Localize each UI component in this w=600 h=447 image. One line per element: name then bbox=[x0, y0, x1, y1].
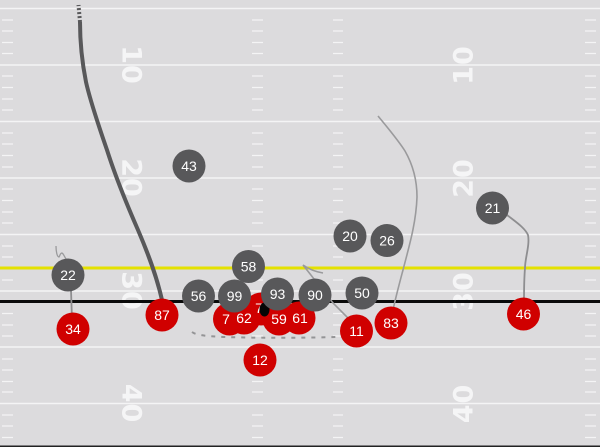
player 26 bbox=[370, 224, 404, 257]
route: player 34 bbox=[71, 290, 72, 320]
football bbox=[260, 302, 270, 316]
player 20: 20 bbox=[342, 228, 358, 244]
first down line bbox=[0, 266, 600, 270]
player 50 bbox=[346, 276, 378, 310]
yard numbers: right side: 30 bbox=[448, 271, 480, 311]
player 43 bbox=[172, 150, 206, 182]
yard numbers: left side: 10 bbox=[116, 45, 146, 85]
route: dashed protection bbox=[192, 332, 337, 338]
player 58 bbox=[232, 250, 265, 283]
yard numbers: left side bbox=[116, 45, 146, 423]
offense player numbers: 7 bbox=[222, 311, 230, 327]
offense player circles bbox=[56, 292, 540, 376]
defense players bbox=[52, 150, 509, 312]
yard numbers: left side: 30 bbox=[116, 271, 146, 311]
offense player numbers: 11 bbox=[349, 323, 364, 339]
routes bbox=[56, 5, 528, 338]
player 22 bbox=[52, 258, 84, 292]
yard numbers: right side: 10 bbox=[448, 45, 480, 85]
player 56: 56 bbox=[191, 288, 206, 304]
route: player 22 squiggle bbox=[56, 246, 67, 260]
route: dashed deep extension bbox=[78, 5, 80, 22]
player 90 bbox=[298, 278, 332, 312]
offense player numbers: 61 bbox=[292, 310, 308, 326]
offense player numbers: 34 bbox=[65, 321, 81, 337]
player 43: 43 bbox=[181, 158, 197, 174]
route: receiver 83 bbox=[378, 116, 417, 310]
offense player numbers bbox=[65, 300, 531, 368]
yard numbers: left side: 40 bbox=[116, 384, 146, 423]
yard numbers: right side: 40 bbox=[448, 384, 480, 423]
player 21 bbox=[476, 192, 509, 224]
player 56 bbox=[182, 280, 215, 312]
player 90: 90 bbox=[307, 287, 323, 303]
player 22: 22 bbox=[60, 267, 76, 283]
player 99 bbox=[218, 280, 251, 312]
offense player numbers: 87 bbox=[154, 307, 170, 323]
player 21: 21 bbox=[485, 200, 500, 216]
offense player numbers: 62 bbox=[236, 310, 252, 326]
route: player 11 bbox=[303, 265, 356, 331]
yard numbers: left side: 20 bbox=[116, 158, 146, 198]
player 99: 99 bbox=[227, 288, 242, 304]
yard numbers: right side bbox=[448, 45, 480, 423]
line of scrimmage bbox=[0, 300, 600, 303]
offense player numbers: 7 bbox=[255, 300, 263, 316]
route: receiver 87 deep bbox=[80, 22, 162, 300]
player 26: 26 bbox=[379, 232, 395, 248]
yard numbers: right side: 20 bbox=[448, 158, 480, 198]
player 50: 50 bbox=[354, 285, 370, 301]
offense player numbers: 59 bbox=[271, 311, 287, 327]
bottom edge bbox=[0, 446, 600, 447]
route: receiver 46 bbox=[507, 215, 528, 302]
player 93 bbox=[261, 278, 294, 310]
player 20 bbox=[334, 220, 366, 252]
offense player numbers: 12 bbox=[252, 352, 268, 368]
player 93: 93 bbox=[270, 286, 285, 302]
player 58: 58 bbox=[241, 258, 256, 274]
offense player numbers: 46 bbox=[516, 306, 531, 322]
offense player numbers: 83 bbox=[383, 315, 399, 331]
